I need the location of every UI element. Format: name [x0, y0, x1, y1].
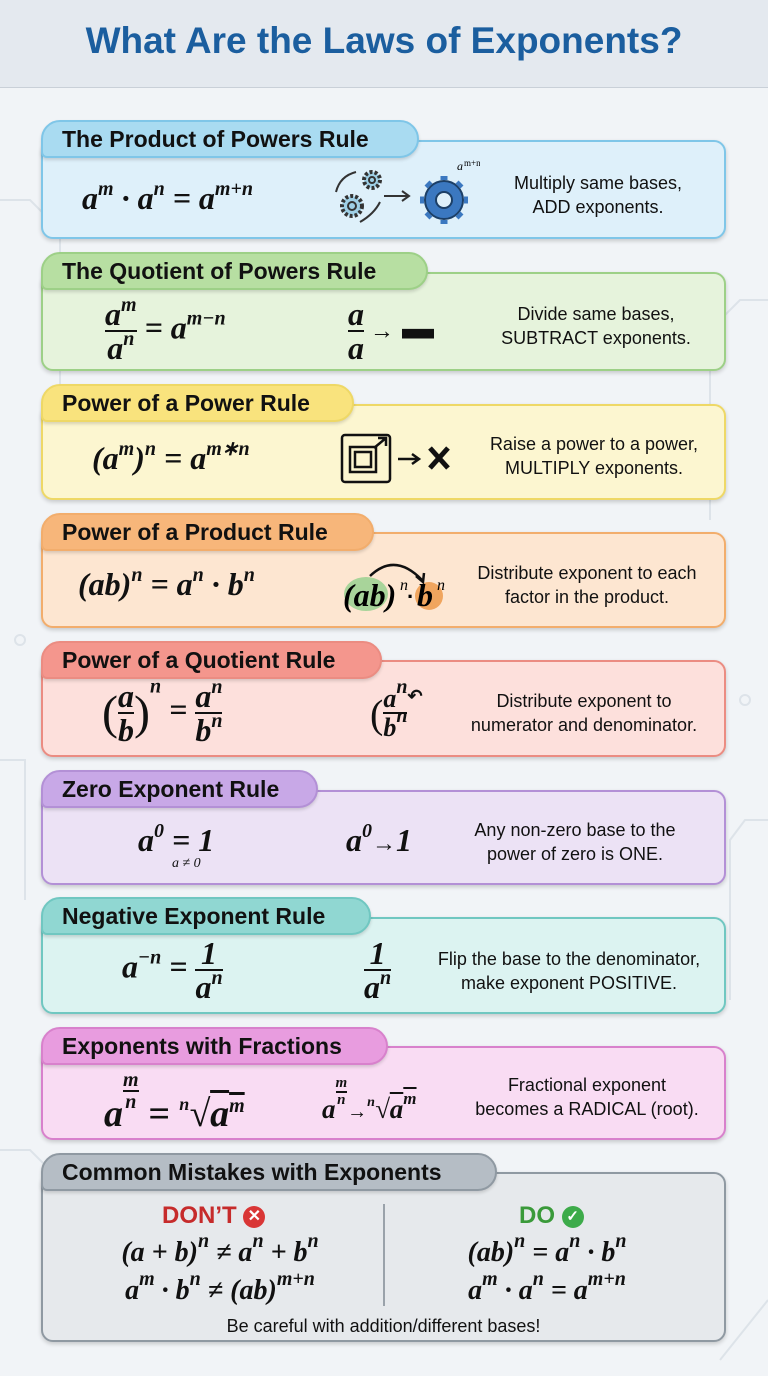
tab: quotient: The Quotient of Powers Rule: [62, 258, 376, 284]
tab: power of power: Power of a Power Rule: [62, 390, 310, 416]
divider: [383, 1204, 385, 1306]
text: fractions: [475, 1075, 699, 1119]
text: power of quotient: Distribute exponent to: [496, 691, 672, 711]
formula: negative exponent: a−n =: [122, 946, 187, 984]
panel: product of powers: [41, 140, 726, 239]
panel: zero exponent: [41, 790, 726, 885]
panel: power of a power: [41, 404, 726, 500]
formula: power of quotient: ( )n =: [102, 675, 187, 740]
icon: a0 to 1: a0→1: [346, 820, 412, 858]
icon: 1 over a^n: [364, 935, 391, 1005]
formula: power of power: (am)n = am∗n: [92, 438, 250, 476]
formula: power of quotient: a: [118, 678, 134, 714]
tab: negative exponent: [41, 897, 371, 935]
footer note: Be careful with addition/different bases!: [227, 1316, 540, 1336]
formulas: don't: [121, 1230, 319, 1306]
tab: zero exponent: Zero Exponent Rule: [62, 776, 279, 802]
formula: fractions: a = n√am: [104, 1093, 245, 1135]
text: fractions: Fractional exponent: [508, 1075, 666, 1095]
text: negative exponent: [438, 949, 700, 993]
note: a not zero: a ≠ 0: [172, 856, 201, 871]
text: power of quotient: numerator and denominator.: [471, 715, 697, 735]
tab: zero exponent: [41, 770, 318, 808]
icon: quotient distribution: bn: [383, 705, 407, 742]
panel: power of a product: [41, 532, 726, 628]
tab: product: [41, 120, 419, 158]
text: power of product: factor in the product.: [505, 587, 669, 607]
icon: distribution: [343, 564, 445, 613]
icon: fraction to radical: n: [337, 1092, 346, 1108]
formula: power of quotient: b: [118, 712, 134, 748]
text: fractions: becomes a RADICAL (root).: [475, 1099, 699, 1119]
text: quotient: Divide same bases,: [517, 304, 675, 324]
tab: fractions: Exponents with Fractions: [62, 1033, 342, 1059]
icon: distribution: n: [437, 577, 445, 594]
formula: power of quotient: [102, 675, 222, 748]
heading: do: ✓: [566, 1208, 579, 1225]
text: power of product: Distribute exponent to each: [477, 563, 697, 583]
icon: quotient distribution: an: [383, 676, 407, 713]
heading: don't: DON’T: [162, 1202, 237, 1229]
panel: power of a quotient: [41, 660, 726, 757]
text: power of power: Raise a power to a power,: [490, 434, 698, 454]
formulas: do: (ab)n = an · bn: [468, 1230, 626, 1268]
formula: quotient: [105, 294, 226, 366]
tab: product: The Product of Powers Rule: [62, 126, 369, 152]
icon: distribution: ·: [407, 584, 414, 609]
icon: fraction to radical: a →n√am: [322, 1089, 417, 1124]
formula: quotient: am: [105, 294, 137, 332]
heading: do: [519, 1202, 584, 1229]
icon: a/a minus: → ▬: [370, 309, 434, 345]
panel: common mistakes: [41, 1172, 726, 1342]
formulas: do: am · an = am+n: [468, 1268, 626, 1306]
text: zero exponent: power of zero is ONE.: [487, 844, 663, 864]
icon: a/a minus: a: [348, 296, 364, 332]
text: zero exponent: Any non-zero base to the: [474, 820, 676, 840]
tab: fractions: [41, 1027, 388, 1065]
text: power of product: [477, 563, 697, 607]
formula: fractions: n: [125, 1091, 136, 1113]
tab: quotient: [41, 252, 428, 290]
formula: product: am · an = am+n: [82, 178, 253, 216]
text: negative exponent: make exponent POSITIVE.: [461, 973, 677, 993]
title band: [0, 0, 768, 88]
formula: negative exponent: 1: [201, 935, 217, 971]
icon: distribution: n: [400, 577, 408, 594]
icon: gears: [335, 160, 480, 224]
icon: 1 over a^n: an: [364, 967, 391, 1005]
text: product: [514, 173, 682, 217]
icon: distribution: (ab): [343, 577, 396, 613]
formulas: don't: am · bn ≠ (ab)m+n: [125, 1268, 315, 1306]
formulas: do: [468, 1230, 626, 1306]
formula: negative exponent: an: [195, 967, 223, 1005]
tab: power of quotient: Power of a Quotient Rule: [62, 647, 335, 673]
tab: mistakes: [41, 1153, 497, 1191]
panel: fractional exponents: [41, 1046, 726, 1140]
heading: do: DO: [519, 1202, 555, 1229]
panel: negative exponent: [41, 917, 726, 1014]
tab: power of quotient: [41, 641, 382, 679]
text: quotient: [501, 304, 691, 348]
text: product: ADD exponents.: [532, 197, 664, 217]
formula: negative exponent: [122, 935, 223, 1005]
heading: don't: ✕: [248, 1208, 261, 1225]
tab: power of product: Power of a Product Rule: [62, 519, 328, 545]
text: power of power: MULTIPLY exponents.: [505, 458, 683, 478]
icon: distribution: b: [417, 577, 433, 613]
tab: power of product: [41, 513, 374, 551]
tab: power of power: [41, 384, 354, 422]
icon: quotient distribution: ( ↶: [370, 686, 423, 737]
formula: quotient: = am−n: [145, 307, 226, 345]
formula: fractions: m: [123, 1069, 139, 1091]
icon: a/a minus: [348, 296, 434, 366]
formulas: don't: (a + b)n ≠ an + bn: [121, 1230, 319, 1268]
formula: zero exponent: a0 = 1: [138, 820, 214, 858]
text: product: Multiply same bases,: [514, 173, 682, 193]
text: negative exponent: Flip the base to the denominator,: [438, 949, 700, 969]
text: power of power: [490, 434, 698, 478]
text: quotient: SUBTRACT exponents.: [501, 328, 691, 348]
icon: nested square x: [340, 434, 450, 484]
formula: power of quotient: bn: [195, 710, 222, 748]
formula: power of product: (ab)n = an · bn: [78, 564, 255, 602]
icon: fraction to radical: m: [336, 1075, 347, 1091]
formula: fractions: [104, 1069, 245, 1135]
formula: power of quotient: an: [195, 676, 222, 714]
icon: a/a minus: a: [348, 330, 364, 366]
tab: mistakes: Common Mistakes with Exponents: [62, 1159, 442, 1185]
tab: negative exponent: Negative Exponent Rule: [62, 903, 325, 929]
text: power of quotient: [471, 691, 697, 735]
title: What Are the Laws of Exponents?: [86, 20, 682, 61]
text: zero exponent: [474, 820, 676, 864]
icon: 1 over a^n: 1: [370, 935, 386, 971]
formula: quotient: an: [107, 328, 134, 366]
panel: quotient: [41, 272, 726, 371]
